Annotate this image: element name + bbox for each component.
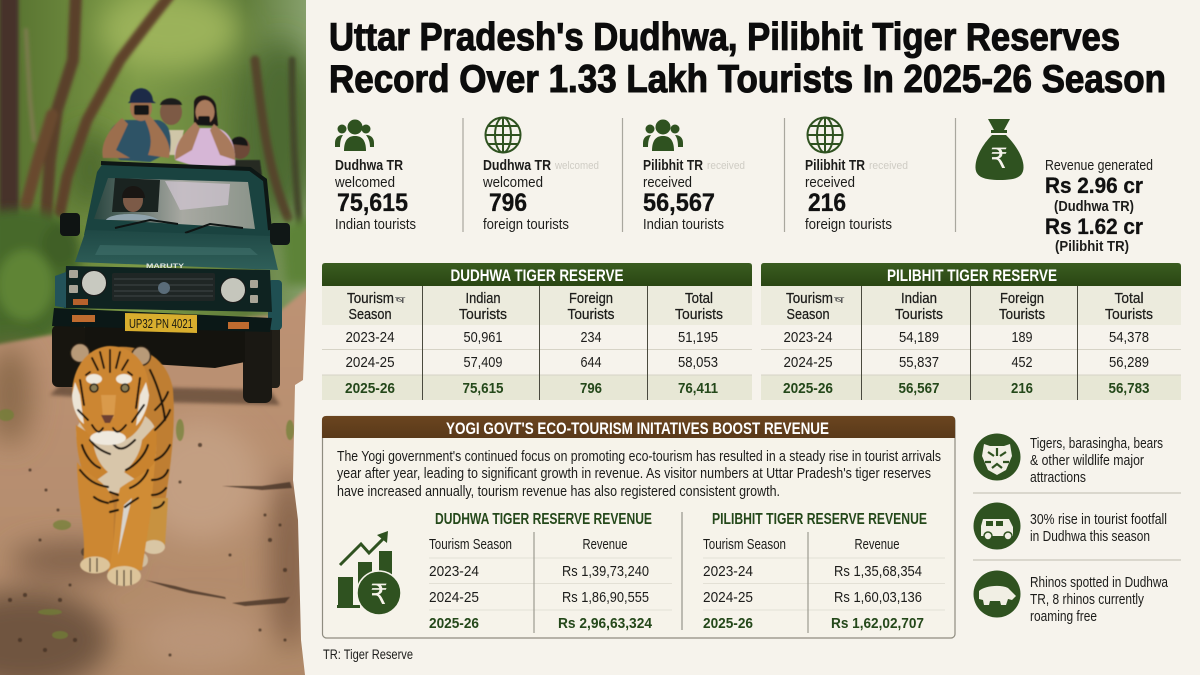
jeep shadow on road — [50, 385, 280, 405]
stat: Pilibhit foreign tourists: foreign tourists — [805, 216, 892, 233]
icon: rhino — [974, 570, 1020, 618]
stat: Pilibhit Indian tourists: received — [643, 174, 692, 191]
table rows: 58,053 — [678, 354, 718, 371]
sub-table: Pilibhit revenue: Rs 1,35,68,354 — [834, 563, 922, 580]
title: Uttar Pradesh's Dudhwa, Pilibhit Tiger Reserves — [329, 16, 1120, 59]
icon: group of people — [643, 120, 683, 151]
brand text: MARUTY — [146, 263, 185, 270]
tiger body — [118, 346, 174, 498]
sub-table: Pilibhit revenue: Rs 1,60,03,136 — [834, 589, 922, 606]
table rows — [783, 329, 1150, 397]
table rows: 2025-26 — [783, 380, 833, 397]
mirrors — [60, 213, 80, 236]
stat: Pilibhit Indian tourists: received — [707, 160, 745, 172]
table rows: 189 — [1012, 329, 1032, 346]
icon: revenue growth chart with rupee coin: ₹ — [370, 578, 388, 611]
table: Dudhwa Tiger Reserve — [322, 263, 752, 400]
icon: safari jeep — [974, 502, 1020, 550]
table rows: 55,837 — [899, 354, 939, 371]
column headers: Tourists — [675, 306, 723, 323]
table rows: 2024-25 — [346, 354, 394, 371]
sub-table: Dudhwa revenue: DUDHWA TIGER RESERVE REVENUE — [435, 511, 652, 528]
column headers — [347, 290, 723, 323]
column headers: ष — [834, 295, 846, 305]
fender — [55, 272, 66, 308]
table rows: 56,289 — [1109, 354, 1149, 371]
column headers: Tourists — [1105, 306, 1153, 323]
tiger — [70, 344, 174, 586]
intro paragraph: The Yogi government's continued focus on promoting eco-tourism has resulted in a steady rise in tourist arrivals — [337, 448, 941, 465]
sub-table: Pilibhit revenue: Tourism Season — [703, 536, 786, 553]
grille — [112, 273, 215, 301]
column headers: Tourism — [347, 290, 394, 307]
intro paragraph: have increased annually, tourism revenue has also registered consistent growth. — [337, 483, 780, 500]
sub-table: Dudhwa revenue: Rs 2,96,63,324 — [558, 615, 653, 632]
stat: Pilibhit foreign tourists: received — [869, 160, 908, 172]
icon: globe — [486, 118, 520, 152]
sub-table: Pilibhit revenue: Rs 1,62,02,707 — [831, 615, 924, 632]
sub-table: Dudhwa revenue: 2024-25 — [429, 589, 479, 606]
left bushes — [0, 209, 315, 350]
stat: Dudhwa foreign tourists: foreign tourists — [483, 216, 569, 233]
stat: Dudhwa Indian tourists — [334, 120, 416, 233]
icon: money bag with rupee: ₹ — [990, 142, 1008, 175]
sub-table: Dudhwa revenue: Rs 1,86,90,555 — [562, 589, 649, 606]
stat: Dudhwa foreign tourists: Dudhwa TR — [483, 157, 551, 174]
jeep — [52, 163, 290, 403]
table rows: 644 — [580, 354, 602, 371]
side list: wildlife attractions: Tigers, barasingha, bears — [1030, 436, 1163, 452]
tiger ears — [70, 344, 90, 362]
stat: revenue generated: Rs 1.62 cr — [1045, 214, 1143, 239]
stat: Dudhwa foreign tourists: 796 — [489, 189, 527, 217]
dirt road — [0, 282, 315, 675]
table rows: 56,783 — [1108, 380, 1150, 397]
jeep front face — [64, 266, 272, 312]
column headers: Indian — [901, 290, 937, 307]
stat: Dudhwa Indian tourists: welcomed — [334, 174, 395, 191]
sub-table: Pilibhit revenue: Revenue — [854, 536, 900, 553]
icon: tiger face — [974, 434, 1020, 480]
table rows: 54,378 — [1109, 329, 1149, 346]
footnote: TR: Tiger Reserve — [323, 647, 413, 662]
column headers: Season — [348, 306, 392, 323]
stat: Dudhwa foreign tourists — [482, 118, 599, 233]
side list: rhinos: TR, 8 rhinos currently — [1030, 592, 1145, 608]
stat: Pilibhit Indian tourists: 56,567 — [643, 189, 715, 217]
sub-table: Pilibhit revenue: 2025-26 — [703, 615, 753, 632]
column headers: Total — [1114, 290, 1144, 307]
side list: tourist footfall: 30% rise in tourist footfall — [1030, 512, 1167, 528]
sub-table: Pilibhit revenue: 2023-24 — [703, 563, 753, 580]
column headers: Total — [685, 290, 713, 307]
table rows: 56,567 — [898, 380, 940, 397]
number plate: UP32 PN 4021 — [129, 316, 193, 331]
side list: rhinos: roaming free — [1030, 609, 1097, 625]
column headers: Tourists — [459, 306, 507, 323]
stat: Pilibhit foreign tourists — [805, 118, 908, 233]
side list: tourist footfall: in Dudhwa this season — [1030, 529, 1150, 545]
table heading: DUDHWA TIGER RESERVE — [450, 266, 624, 285]
table rows: 2025-26 — [345, 380, 395, 397]
table rows: 54,189 — [899, 329, 939, 346]
intro paragraph: year after year, leading to significant growth in revenue. As visitor numbers at Uttar Pradesh's tiger reserves — [337, 465, 931, 482]
column headers: Tourists — [999, 306, 1045, 323]
stat: Pilibhit Indian tourists — [643, 120, 745, 233]
panel: eco-tourism revenue — [322, 416, 955, 638]
sub-table: Pilibhit revenue: PILIBHIT TIGER RESERVE REVENUE — [712, 511, 927, 528]
headlights — [82, 270, 106, 296]
roll bar and cab frame — [84, 163, 272, 240]
stat: revenue generated — [975, 119, 1153, 255]
table rows: 452 — [1012, 354, 1032, 371]
stat: revenue generated: (Dudhwa TR) — [1054, 198, 1134, 215]
intro paragraph — [337, 448, 941, 500]
table rows: 216 — [1011, 380, 1033, 397]
table rows: 2023-24 — [346, 329, 394, 346]
sub-table: Dudhwa revenue: Tourism Season — [429, 536, 512, 553]
panel heading: YOGI GOVT'S ECO-TOURISM INITATIVES BOOST REVENUE — [446, 419, 829, 438]
column headers: Foreign — [1000, 290, 1044, 307]
stat: revenue generated: Revenue generated — [1045, 157, 1153, 174]
windshield — [94, 178, 255, 229]
table rows: 234 — [580, 329, 602, 346]
sub-table: Dudhwa revenue: Revenue — [582, 536, 628, 553]
panel heading — [322, 416, 955, 438]
table heading — [761, 263, 1181, 286]
column headers: Tourists — [895, 306, 943, 323]
wheels — [52, 280, 282, 403]
column headers: Indian — [466, 290, 500, 307]
side list: wildlife attractions: & other wildlife major — [1030, 453, 1144, 469]
back legs and paw — [146, 498, 168, 548]
side list: rhinos — [974, 570, 1169, 625]
stat: Dudhwa Indian tourists: Dudhwa TR — [335, 157, 403, 174]
stat: revenue generated: (Pilibhit TR) — [1055, 238, 1129, 255]
stat: Pilibhit foreign tourists: 216 — [808, 189, 846, 217]
sub-table: Pilibhit revenue: 2024-25 — [703, 589, 753, 606]
icon: group of people — [335, 120, 374, 151]
column headers — [786, 290, 1153, 323]
tiger stripes — [80, 370, 170, 512]
table: Pilibhit Tiger Reserve — [761, 263, 1181, 400]
icon: revenue growth chart with rupee coin — [337, 531, 401, 615]
stat: Dudhwa Indian tourists: Indian tourists — [335, 216, 416, 233]
chest — [77, 416, 156, 494]
number plate — [125, 313, 197, 333]
table rows: 76,411 — [678, 380, 718, 397]
side list: rhinos: Rhinos spotted in Dudhwa — [1030, 575, 1169, 591]
torn paper edge — [293, 0, 307, 675]
stat: Dudhwa foreign tourists: welcomed — [482, 174, 543, 191]
wipers — [115, 220, 243, 233]
table rows: 57,409 — [464, 354, 502, 371]
sub-table: Dudhwa revenue — [429, 511, 672, 633]
stat: revenue generated: Rs 2.96 cr — [1045, 173, 1143, 198]
column headers: Tourists — [568, 306, 614, 323]
sub-table: Pilibhit revenue — [703, 511, 945, 633]
photo: safari jeep and tiger on forest road — [0, 0, 320, 675]
column headers: ष — [395, 295, 407, 305]
column headers: Season — [786, 306, 830, 323]
column headers: Foreign — [569, 290, 613, 307]
table rows: 75,615 — [462, 380, 504, 397]
forest background — [0, 0, 320, 350]
stat: Dudhwa foreign tourists: welcomed — [554, 160, 599, 172]
table rows: 51,195 — [678, 329, 718, 346]
people on the jeep — [102, 88, 262, 175]
table rows — [345, 329, 718, 397]
side list: tourist footfall — [974, 502, 1167, 550]
sub-table: Dudhwa revenue: 2025-26 — [429, 615, 479, 632]
icon: globe — [808, 118, 842, 152]
child in the jeep — [106, 186, 158, 220]
icon: money bag with rupee — [975, 119, 1024, 180]
sub-table: Dudhwa revenue: 2023-24 — [429, 563, 479, 580]
sub-table: Dudhwa revenue: Rs 1,39,73,240 — [562, 563, 649, 580]
side list: wildlife attractions: attractions — [1030, 470, 1086, 486]
table heading: PILIBHIT TIGER RESERVE — [887, 266, 1057, 285]
table rows: 2024-25 — [784, 354, 832, 371]
tiger head — [72, 346, 149, 444]
table rows: 2023-24 — [784, 329, 832, 346]
stat: Dudhwa Indian tourists: 75,615 — [337, 189, 408, 217]
front legs — [77, 462, 114, 566]
stat: Pilibhit Indian tourists: Pilibhit TR — [643, 157, 703, 174]
stat: Pilibhit Indian tourists: Indian tourists — [643, 216, 724, 233]
table heading — [322, 263, 752, 286]
stat: Pilibhit foreign tourists: Pilibhit TR — [805, 157, 865, 174]
column headers: Tourism — [786, 290, 833, 307]
table rows: 50,961 — [464, 329, 502, 346]
stat separators — [463, 118, 956, 232]
hood — [75, 230, 278, 270]
table rows: 796 — [580, 380, 602, 397]
title — [329, 16, 1166, 101]
side list: wildlife attractions — [974, 434, 1163, 486]
stat: Pilibhit foreign tourists: received — [805, 174, 855, 191]
